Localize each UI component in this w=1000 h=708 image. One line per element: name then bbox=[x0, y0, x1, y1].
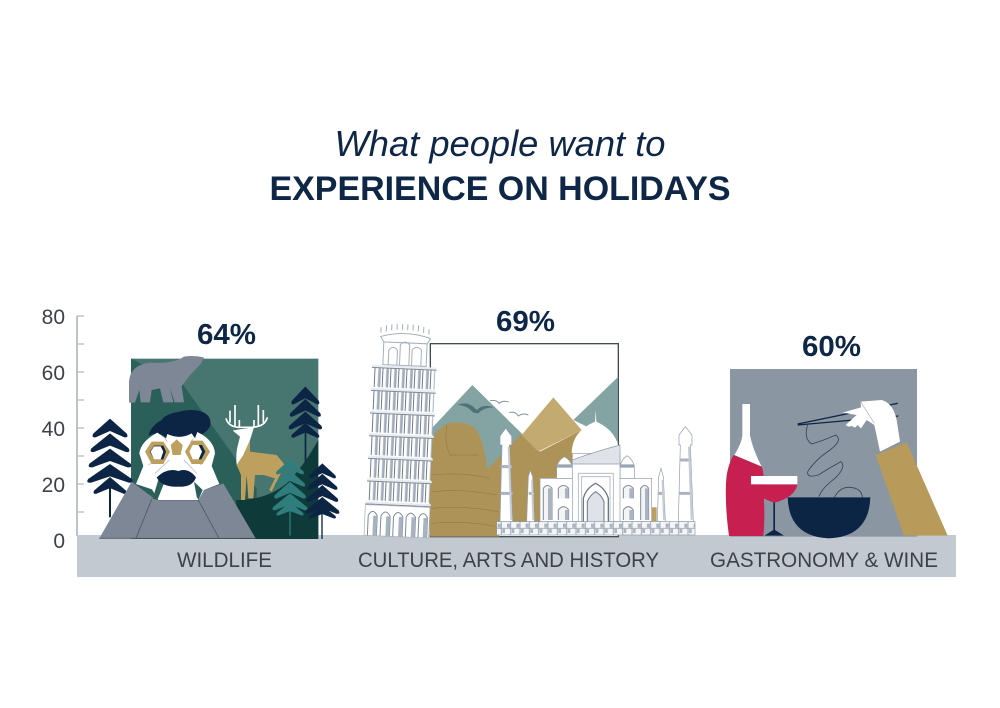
outer minarets bbox=[500, 427, 693, 522]
main hall inner frame bbox=[578, 473, 613, 522]
collar bbox=[153, 479, 203, 500]
wings bbox=[540, 456, 652, 522]
wing shading bbox=[557, 461, 634, 471]
small gold fill bbox=[651, 507, 657, 521]
face and hands bbox=[136, 432, 219, 500]
inner arch bbox=[587, 492, 604, 522]
main hall frieze bbox=[572, 445, 620, 464]
dome bbox=[572, 410, 619, 453]
icon: Taj Mahal bbox=[497, 410, 695, 535]
wing arches bbox=[543, 485, 649, 520]
icon: bear bbox=[129, 356, 204, 403]
noodles bbox=[806, 425, 862, 497]
torso bbox=[99, 482, 256, 538]
icon: man with binoculars bbox=[99, 410, 256, 538]
icon: cocktail glass bbox=[751, 476, 797, 536]
minaret shading bbox=[501, 460, 693, 493]
panel: wildlife bbox=[87, 356, 339, 539]
gastronomy background bbox=[730, 369, 917, 537]
panel: gastronomy bbox=[726, 369, 948, 538]
icon: birds bbox=[457, 400, 528, 416]
icon: bowl bbox=[788, 497, 870, 538]
belfry bbox=[379, 323, 431, 367]
tower tiers bbox=[368, 367, 435, 504]
cornices bbox=[365, 366, 437, 505]
hair bbox=[148, 410, 211, 438]
icon: teal tree bbox=[273, 459, 307, 536]
title: What people want to bbox=[334, 123, 666, 164]
value labels bbox=[197, 306, 861, 363]
value: wildlife: 64% bbox=[197, 319, 256, 351]
y axis: 0 bbox=[53, 530, 65, 553]
icon: leaning tower of Pisa bbox=[364, 323, 439, 538]
y axis: 40 bbox=[42, 418, 65, 441]
label: wildlife: WILDLIFE bbox=[177, 549, 272, 572]
binoculars bridge bbox=[171, 439, 183, 455]
label: culture: CULTURE, ARTS AND HISTORY bbox=[358, 549, 659, 572]
icon: hand bbox=[843, 400, 900, 452]
main hall bbox=[572, 453, 620, 522]
icon: sphinx bbox=[430, 422, 499, 537]
ground arcade bbox=[364, 505, 430, 538]
binoculars bbox=[145, 441, 210, 464]
y axis: 80 bbox=[42, 306, 65, 329]
y axis bbox=[42, 306, 84, 553]
icon: chopsticks bbox=[798, 403, 898, 425]
panel: culture bbox=[364, 323, 695, 538]
title: EXPERIENCE ON HOLIDAYS bbox=[270, 170, 730, 208]
y axis: 60 bbox=[42, 362, 65, 385]
label: gastronomy: GASTRONOMY & WINE bbox=[710, 549, 938, 572]
moustache bbox=[157, 470, 196, 487]
icon: back right tree bbox=[289, 386, 322, 462]
icon: front right tree bbox=[305, 463, 339, 539]
baseline band bbox=[77, 535, 956, 577]
mountains bbox=[432, 377, 618, 533]
value: culture: 69% bbox=[496, 306, 555, 338]
y axis: 20 bbox=[42, 474, 65, 497]
category labels bbox=[177, 549, 938, 572]
icon: deer bbox=[226, 405, 285, 500]
icon: wine bottle bbox=[726, 404, 764, 536]
icon: left tree bbox=[87, 419, 133, 517]
icon: sleeve bbox=[876, 442, 948, 536]
balustrade bbox=[497, 522, 695, 535]
finger lines bbox=[148, 439, 202, 473]
main arch bbox=[583, 483, 608, 522]
value: gastronomy: 60% bbox=[802, 331, 861, 363]
title bbox=[270, 123, 730, 208]
culture frame bbox=[430, 344, 618, 537]
wildlife background bbox=[131, 359, 318, 539]
